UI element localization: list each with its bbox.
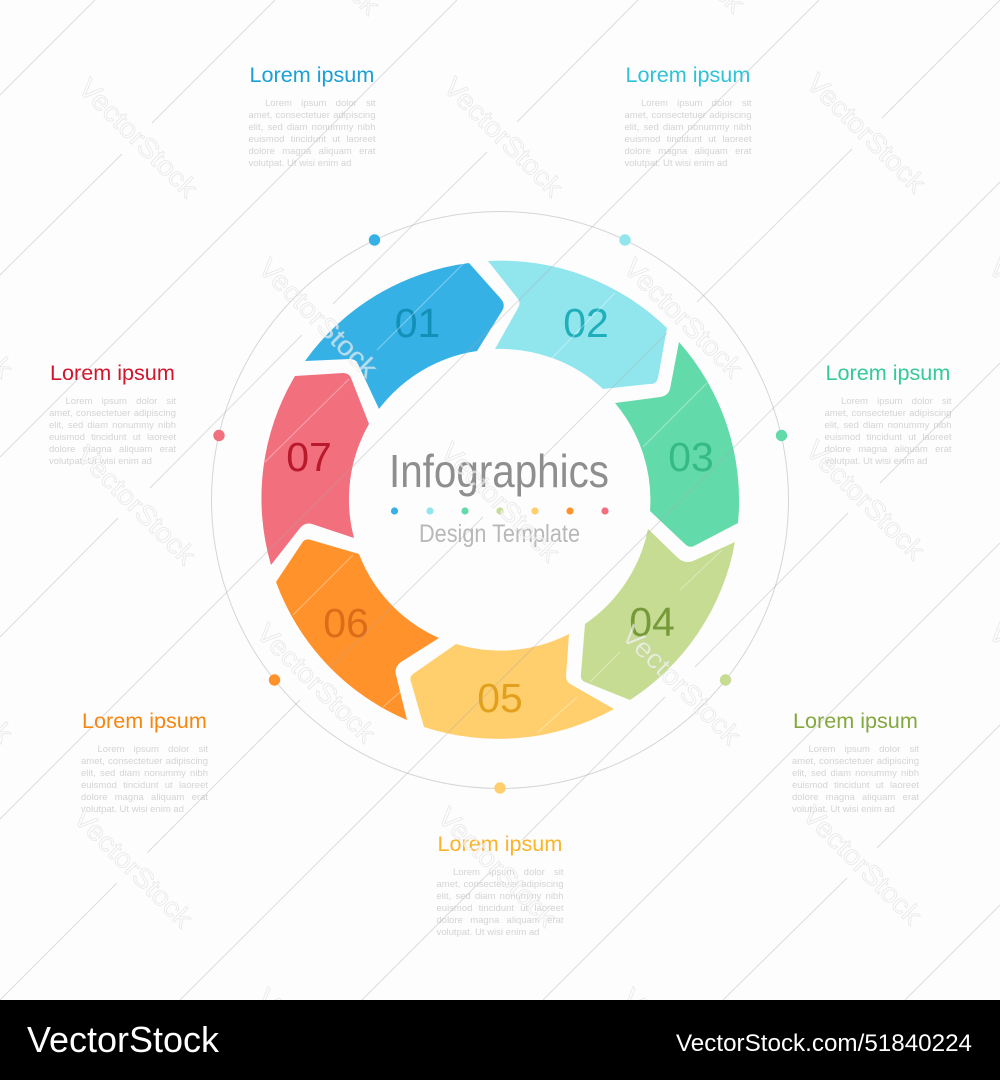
heading 07: Lorem ipsum	[50, 360, 175, 385]
paragraph 06: elit, sed diam nonummy nibh	[81, 768, 208, 779]
text block 05	[436, 831, 564, 938]
paragraph 02	[624, 98, 752, 169]
segment 02: 02	[563, 300, 609, 346]
paragraph 01: dolore magna aliquam erat	[248, 146, 376, 157]
heading 05: Lorem ipsum	[438, 831, 562, 856]
paragraph 01	[248, 98, 376, 169]
paragraph 03: volutpat. Ut wisi enim ad	[824, 456, 927, 467]
paragraph 02: elit, sed diam nonummy nibh	[624, 122, 752, 133]
paragraph 07	[49, 396, 176, 467]
paragraph 02: amet, consectetuer adipiscing	[624, 110, 752, 121]
heading 01: Lorem ipsum	[250, 62, 374, 87]
watermark overlay: VectorStock	[253, 253, 384, 384]
paragraph 01: elit, sed diam nonummy nibh	[248, 122, 376, 133]
paragraph 02: dolore magna aliquam erat	[624, 146, 752, 157]
paragraph 07: dolore magna aliquam erat	[49, 444, 176, 455]
watermark overlay: VectorStock	[618, 253, 749, 384]
paragraph 01: Lorem ipsum dolor sit	[265, 98, 376, 109]
watermark overlay: VectorStock	[797, 800, 928, 931]
paragraph 04: volutpat. Ut wisi enim ad	[792, 804, 895, 815]
paragraph 03: amet, consectetuer adipiscing	[824, 408, 952, 419]
outer thin ring with marker dots	[212, 212, 788, 794]
segment 07: 07	[286, 434, 332, 480]
paragraph 07: elit, sed diam nonummy nibh	[49, 420, 176, 431]
watermark overlay: VectorStock	[68, 803, 199, 934]
segment 05	[410, 634, 614, 739]
centre title: Infographics	[389, 445, 609, 497]
paragraph 05: euismod tincidunt ut laoreet	[436, 903, 564, 914]
paragraph 04: euismod tincidunt ut laoreet	[792, 780, 919, 791]
watermark overlay: VectorStock	[616, 620, 747, 751]
paragraph 07: euismod tincidunt ut laoreet	[49, 432, 176, 443]
paragraph 07: volutpat. Ut wisi enim ad	[49, 456, 152, 467]
paragraph 02: Lorem ipsum dolor sit	[641, 98, 752, 109]
paragraph 04: dolore magna aliquam erat	[792, 792, 919, 803]
paragraph 03: euismod tincidunt ut laoreet	[824, 432, 952, 443]
paragraph 02: euismod tincidunt ut laoreet	[624, 134, 752, 145]
footer brand: VectorStock	[27, 1019, 220, 1060]
paragraph 02: volutpat. Ut wisi enim ad	[624, 158, 727, 169]
segment 03: 03	[668, 434, 714, 480]
paragraph 06: euismod tincidunt ut laoreet	[81, 780, 208, 791]
paragraph 04: amet, consectetuer adipiscing	[792, 756, 919, 767]
paragraph 05: Lorem ipsum dolor sit	[453, 867, 564, 878]
paragraph 06: dolore magna aliquam erat	[81, 792, 208, 803]
watermark overlay: VectorStock	[251, 618, 382, 749]
watermark overlay: VectorStock	[801, 68, 932, 199]
paragraph 01: euismod tincidunt ut laoreet	[248, 134, 376, 145]
segment 04: 04	[629, 599, 675, 645]
text block 01	[248, 62, 376, 169]
paragraph 05: elit, sed diam nonummy nibh	[436, 891, 564, 902]
watermark overlay: VectorStock	[800, 435, 931, 566]
segment 02	[488, 261, 667, 389]
text block 07	[49, 360, 176, 467]
paragraph 05	[436, 867, 564, 938]
paragraph 05: volutpat. Ut wisi enim ad	[436, 927, 539, 938]
heading 06: Lorem ipsum	[82, 708, 207, 733]
paragraph 03	[824, 396, 952, 467]
paragraph 03: dolore magna aliquam erat	[824, 444, 952, 455]
segment 07	[261, 373, 369, 565]
paragraph 03: elit, sed diam nonummy nibh	[824, 420, 952, 431]
centre colour dots	[391, 507, 609, 515]
watermark overlay: VectorStock	[73, 73, 204, 204]
text block 06	[81, 708, 208, 815]
paragraph 04	[792, 744, 919, 815]
heading 03: Lorem ipsum	[826, 360, 950, 385]
paragraph 01: volutpat. Ut wisi enim ad	[248, 158, 351, 169]
watermark overlay: VectorStock	[438, 72, 569, 203]
centre subtitle: Design Template	[419, 520, 580, 548]
paragraph 06: amet, consectetuer adipiscing	[81, 756, 208, 767]
paragraph 06: Lorem ipsum dolor sit	[98, 744, 208, 755]
text block 04	[792, 708, 919, 815]
segment 03	[615, 342, 739, 547]
text block 03	[824, 360, 952, 467]
paragraph 05: dolore magna aliquam erat	[436, 915, 564, 926]
heading 02: Lorem ipsum	[626, 62, 750, 87]
text block 02	[624, 62, 752, 169]
paragraph 04: elit, sed diam nonummy nibh	[792, 768, 919, 779]
paragraph 04: Lorem ipsum dolor sit	[808, 744, 919, 755]
paragraph 06	[81, 744, 208, 815]
watermark overlay: VectorStock	[71, 440, 202, 571]
paragraph 01: amet, consectetuer adipiscing	[248, 110, 376, 121]
segment 01: 01	[395, 300, 440, 346]
segment 05: 05	[477, 675, 523, 721]
footer image id: VectorStock.com/51840224	[676, 1030, 972, 1057]
segment 01	[305, 263, 504, 409]
segment 06	[276, 539, 439, 720]
heading 04: Lorem ipsum	[793, 708, 918, 733]
segment 06: 06	[323, 600, 369, 646]
paragraph 07: Lorem ipsum dolor sit	[66, 396, 176, 407]
footer bar	[0, 1000, 1000, 1080]
paragraph 07: amet, consectetuer adipiscing	[49, 408, 176, 419]
segment 04	[581, 529, 735, 700]
watermark overlay: VectorStock	[432, 802, 563, 933]
paragraph 06: volutpat. Ut wisi enim ad	[81, 804, 184, 815]
paragraph 03: Lorem ipsum dolor sit	[841, 396, 952, 407]
watermark overlay: VectorStock	[435, 437, 566, 568]
paragraph 05: amet, consectetuer adipiscing	[436, 879, 564, 890]
